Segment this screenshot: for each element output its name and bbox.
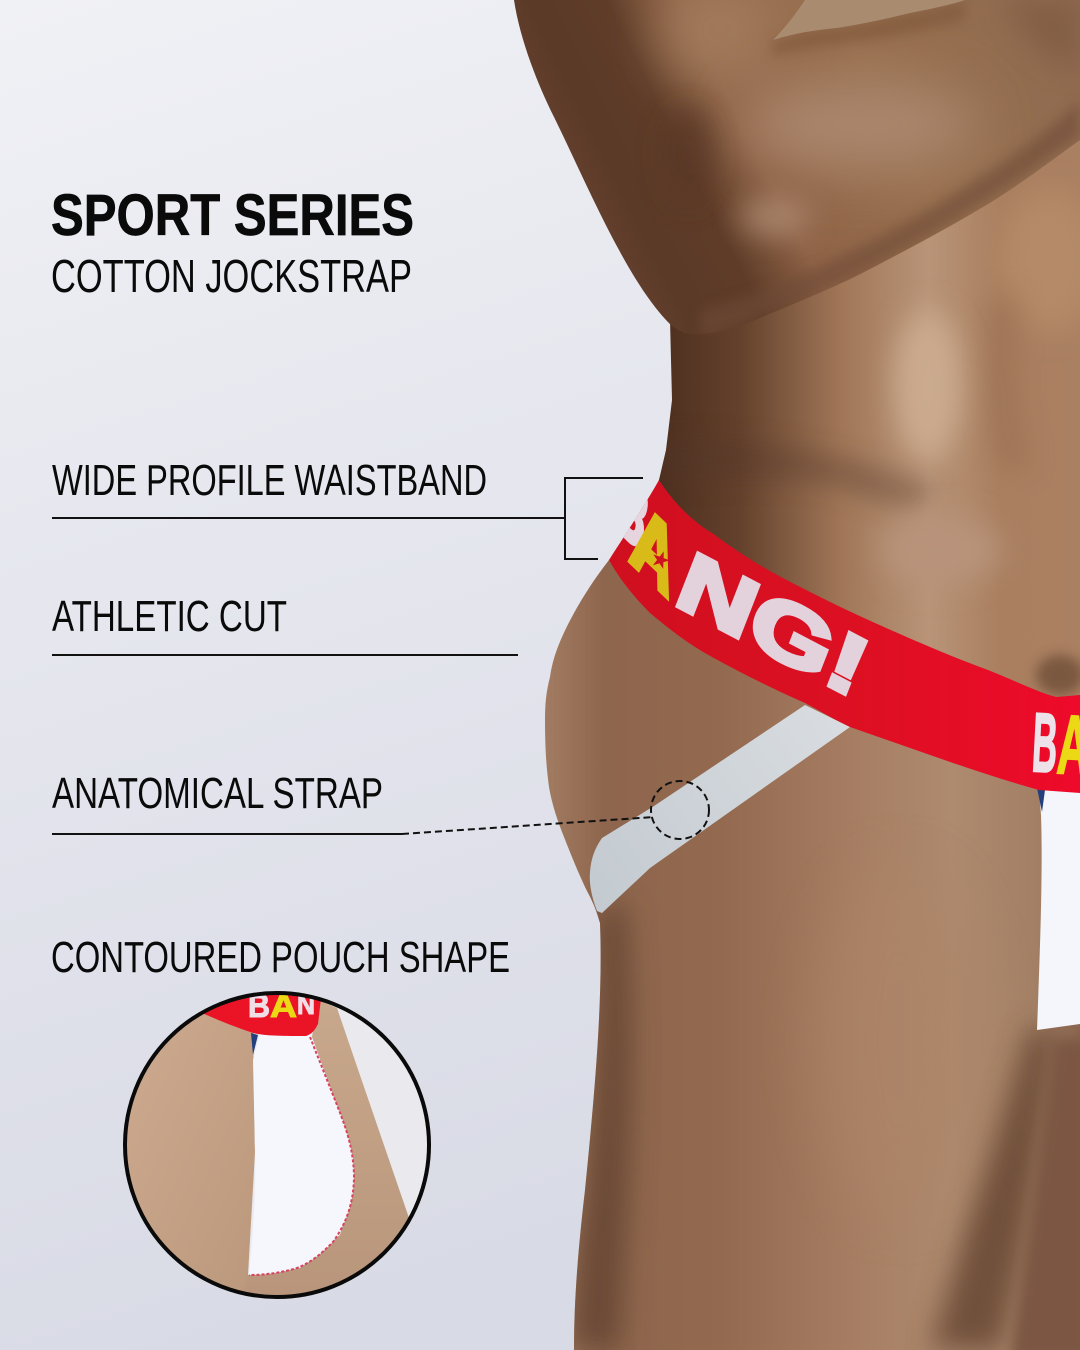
inset: pouch detail circle bbox=[120, 988, 440, 1310]
label: anatomical strap: ANATOMICAL STRAP bbox=[52, 769, 383, 818]
strap bbox=[590, 705, 850, 913]
subtitle: COTTON JOCKSTRAP bbox=[51, 250, 412, 302]
label: anatomical strap bbox=[52, 769, 709, 839]
label: wide profile waistband bbox=[52, 456, 643, 559]
pouch bbox=[1037, 788, 1080, 1030]
label: wide profile waistband: WIDE PROFILE WAISTBAND bbox=[52, 456, 487, 505]
arm bbox=[510, 0, 1080, 340]
inset: pouch detail circle: N bbox=[297, 989, 315, 1020]
waistband logo bbox=[609, 456, 1080, 793]
waistband logo: B bbox=[609, 456, 655, 568]
waistband bbox=[609, 456, 1080, 793]
label: contoured pouch shape: CONTOURED POUCH SHAPE bbox=[51, 933, 510, 982]
torso bbox=[658, 140, 1080, 697]
label: athletic cut: ATHLETIC CUT bbox=[52, 592, 287, 641]
waistband logo: NG! bbox=[666, 534, 881, 715]
waistband logo: ★ bbox=[648, 547, 673, 574]
thigh and leg bbox=[540, 550, 1080, 1350]
waistband logo: A bbox=[625, 484, 684, 617]
title: SPORT SERIES bbox=[51, 183, 414, 248]
inset: pouch detail circle: A bbox=[270, 988, 297, 1024]
inset: pouch detail circle: B bbox=[248, 988, 270, 1024]
forearm bbox=[773, 0, 965, 40]
photo: model torso and product bbox=[510, 0, 1080, 1350]
